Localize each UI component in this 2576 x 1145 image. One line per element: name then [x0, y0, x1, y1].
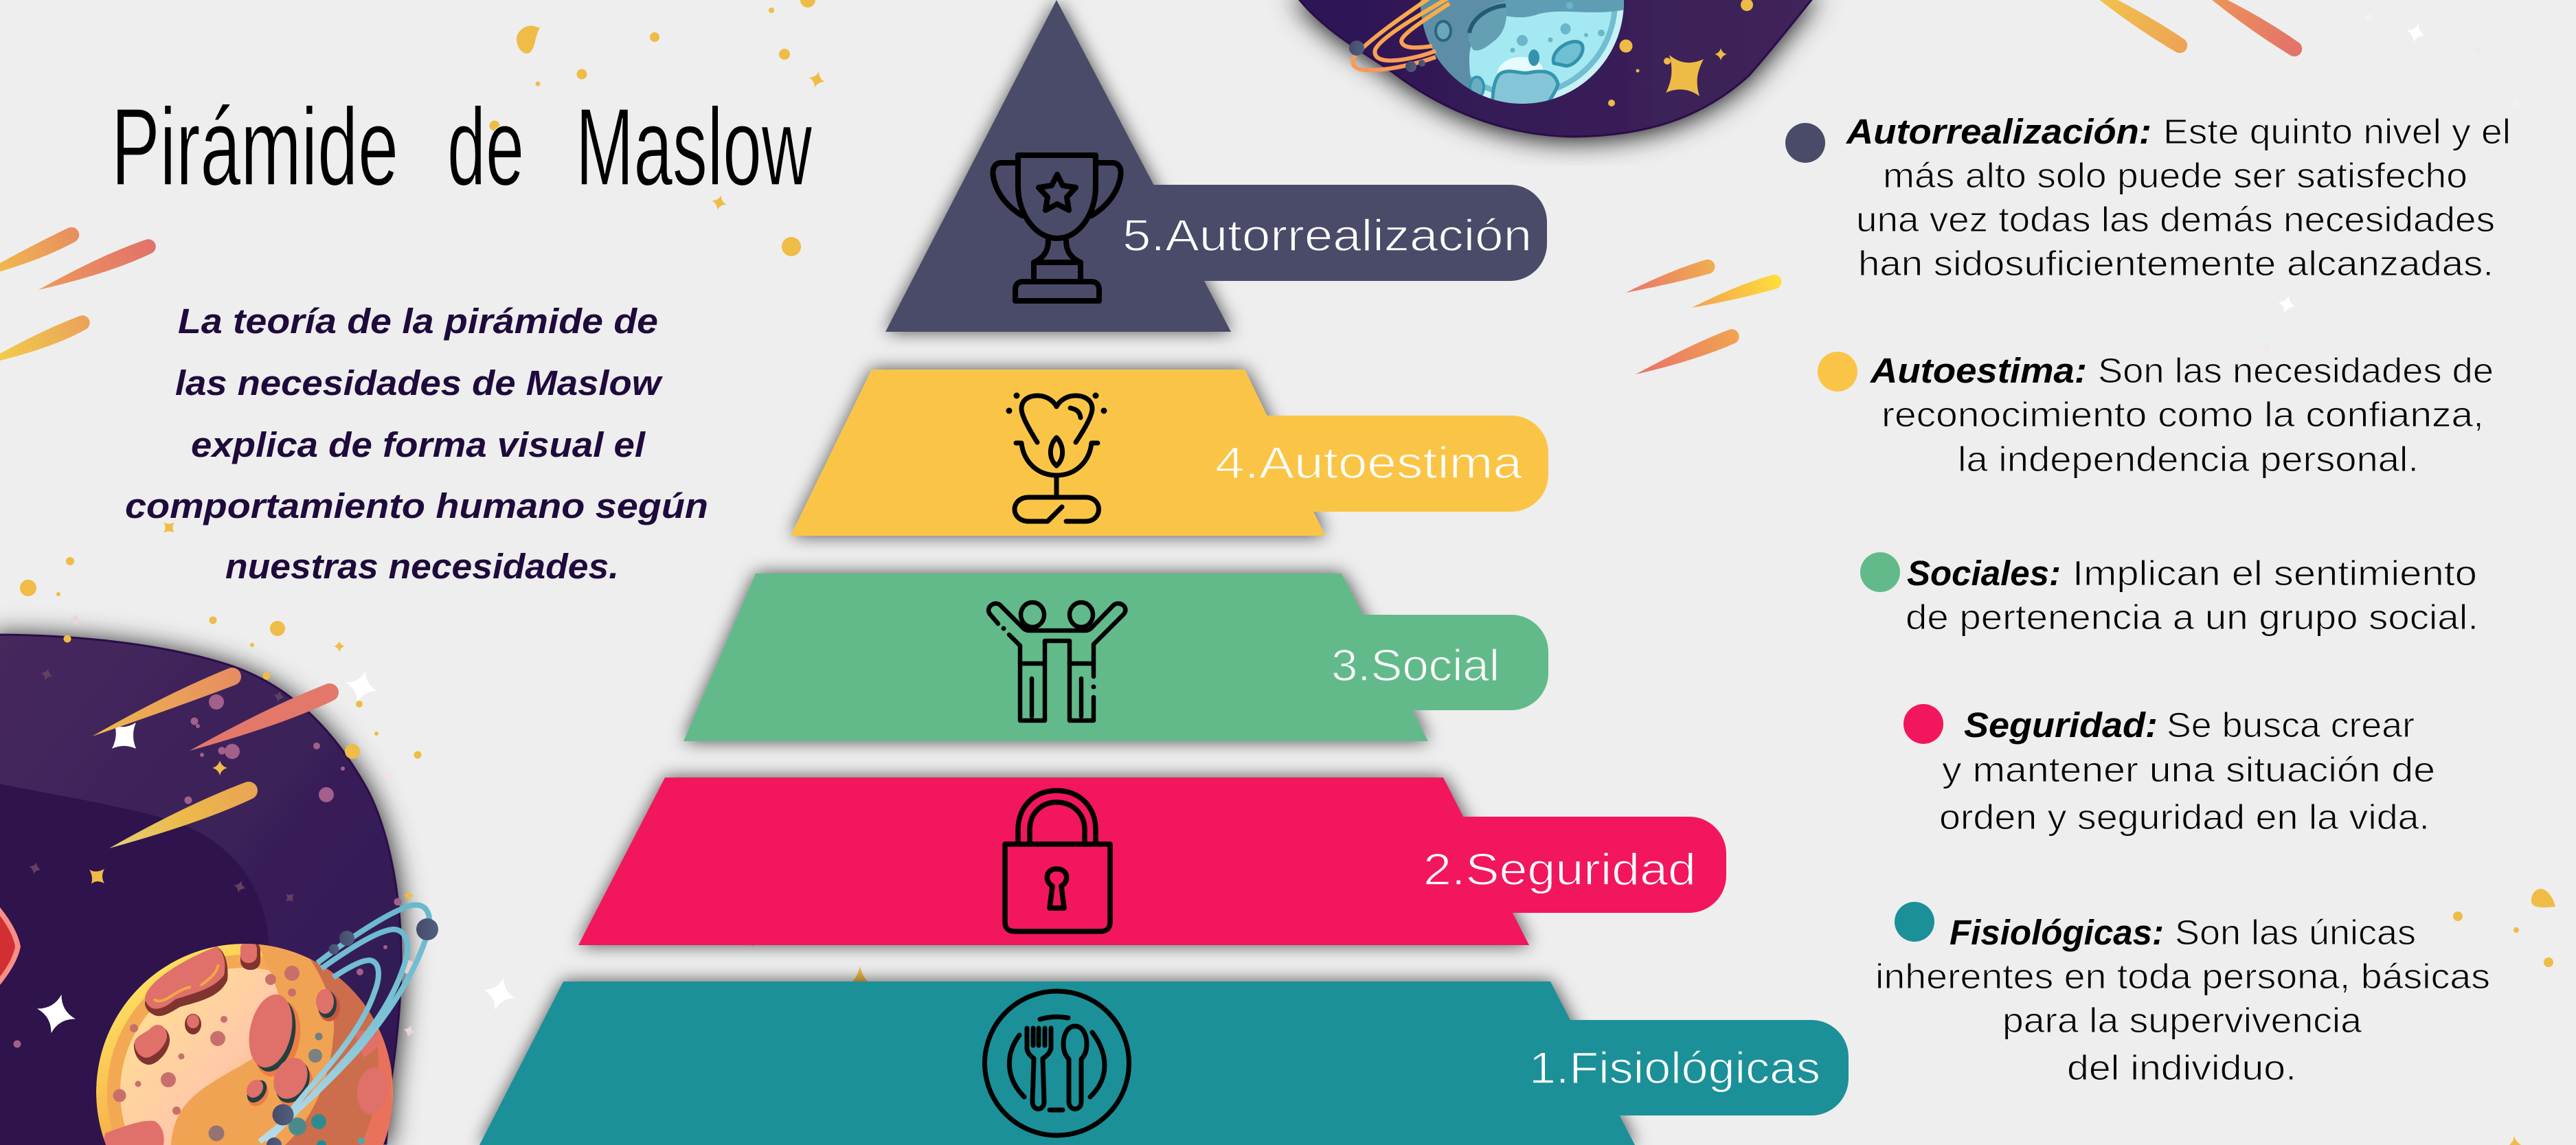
- description: Autoestima: [1818, 351, 2494, 479]
- intro text block: explica de forma visual el: [191, 425, 646, 464]
- description: Autorrealización: más alto solo puede ser satisfecho: [1883, 156, 2467, 195]
- planet: [96, 941, 393, 1145]
- description: Sociales: Sociales:: [1907, 554, 2061, 593]
- description: Fisiológicas: Son las únicas: [2175, 913, 2416, 952]
- illustration: lower left planet: [0, 612, 519, 1145]
- intro text block: La teoría de la pirámide de: [178, 302, 658, 341]
- description: Sociales: de pertenencia a un grupo social.: [1906, 598, 2478, 637]
- inner dark wave: [0, 782, 270, 1145]
- pyramid level 3: Social: [683, 574, 1548, 741]
- title: Maslow: [576, 85, 812, 208]
- tab: [1133, 185, 1547, 281]
- title: de: [447, 85, 524, 208]
- tab: [1357, 615, 1548, 710]
- top stars and dots: [1608, 0, 1753, 106]
- description: Autorrealización: han sidosuficientemente alcanzadas.: [1858, 244, 2494, 283]
- tab: [1257, 416, 1548, 512]
- label: 1.Fisiológicas: [1529, 1043, 1820, 1093]
- icon: heart and meditating figure: [1006, 393, 1107, 521]
- orbit dots: [1349, 41, 1425, 72]
- description: Seguridad: orden y seguridad en la vida.: [1939, 797, 2430, 837]
- description: Autorrealización: [1785, 112, 2511, 283]
- pyramid level 2: Seguridad: [578, 778, 1726, 945]
- label: 3.Social: [1331, 640, 1500, 690]
- decoration: comets right: [1626, 0, 2302, 374]
- description: Seguridad: Se busca crear: [2167, 705, 2415, 745]
- description: Fisiológicas: del individuo.: [2067, 1048, 2296, 1087]
- pyramid level 5: Autorrealización: [885, 0, 1547, 332]
- description: Fisiológicas: inherentes en toda persona, básicas: [1875, 957, 2490, 996]
- label: 4.Autoestima: [1215, 438, 1523, 488]
- decoration: gold dots and stars top left: [20, 0, 827, 596]
- moon: [1415, 0, 1625, 110]
- description: Autorrealización: una vez todas las demás necesidades: [1856, 200, 2495, 239]
- title: Pirámide: [111, 85, 398, 208]
- description: Autorrealización: Este quinto nivel y el: [2163, 112, 2511, 151]
- description: Autoestima: Autoestima:: [1869, 351, 2087, 390]
- blue rings: [260, 905, 429, 1142]
- dim stars and mauve dots: [14, 612, 417, 1048]
- description: Autoestima: la independencia personal.: [1958, 440, 2419, 479]
- description: Autoestima: Son las necesidades de: [2098, 351, 2494, 390]
- planet shaded half: [171, 944, 392, 1145]
- decoration: faint stars and dots right: [2219, 14, 2520, 352]
- intro text block: nuestras necesidades.: [225, 547, 619, 586]
- description: Fisiológicas: Fisiológicas:: [1950, 913, 2164, 952]
- description: Autoestima: reconocimiento como la confianza,: [1882, 395, 2484, 434]
- title: [111, 85, 812, 208]
- description: Seguridad: [1903, 704, 2435, 837]
- icon: trophy: [993, 155, 1121, 301]
- craters: [249, 993, 340, 1107]
- description: Seguridad: y mantener una situación de: [1942, 750, 2435, 789]
- icon: plate with cutlery: [985, 991, 1129, 1135]
- description: Fisiológicas: [1875, 902, 2490, 1087]
- intro text block: [125, 302, 708, 586]
- gold stars behind pyramid: [743, 928, 886, 1019]
- label: 2.Seguridad: [1423, 844, 1696, 894]
- illustration: top planet: [1294, 0, 1817, 137]
- red shape at edge: [0, 903, 21, 989]
- description: Sociales: [1860, 552, 2478, 637]
- decoration: comets top left: [0, 227, 156, 365]
- top space blob: [1294, 0, 1817, 137]
- description: Fisiológicas: para la supervivencia: [2002, 1001, 2362, 1040]
- lower left space blob: [0, 635, 401, 1144]
- decoration: gold dots lower right: [2453, 889, 2555, 1145]
- intro text block: comportamiento humano según: [125, 486, 708, 525]
- description: Seguridad: Seguridad:: [1964, 705, 2158, 745]
- label: 5.Autorrealización: [1122, 210, 1532, 260]
- intro text block: las necesidades de Maslow: [175, 363, 664, 403]
- pyramid level 1: Fisiológicas: [479, 982, 1849, 1145]
- orbit dots: [267, 918, 438, 1145]
- orange rings: [1353, 0, 1451, 70]
- comets inside blob: [92, 668, 339, 848]
- tab: [1570, 1020, 1849, 1115]
- description: Sociales: Implican el sentimiento: [2072, 554, 2477, 593]
- description: Autorrealización: Autorrealización:: [1845, 112, 2151, 151]
- pyramid level 4: Autoestima: [791, 370, 1548, 536]
- crater highlights: [154, 964, 218, 1001]
- icon: padlock: [1005, 791, 1110, 931]
- tab: [1460, 817, 1726, 913]
- icon: two people: [988, 602, 1125, 721]
- white and gold stars: [32, 617, 519, 1039]
